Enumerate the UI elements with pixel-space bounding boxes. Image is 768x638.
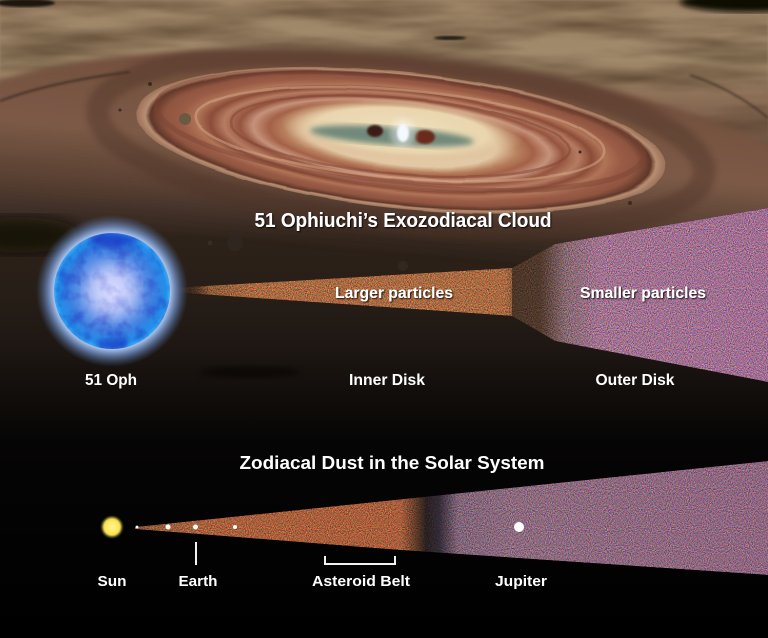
label: Jupiter: Jupiter xyxy=(495,573,547,590)
label: Asteroid Belt: Asteroid Belt xyxy=(312,573,410,590)
Asteroid Belt bracket xyxy=(325,556,395,564)
label: inner disk: Inner Disk xyxy=(349,372,425,389)
heading: zodiacal dust: Zodiacal Dust in the Solar System xyxy=(240,453,544,473)
planet markers xyxy=(136,522,524,532)
illustration: circumstellar disk xyxy=(89,29,713,255)
label: outer disk: Outer Disk xyxy=(596,372,675,389)
sun xyxy=(100,515,124,539)
rocks in the disk xyxy=(118,82,632,271)
label: smaller particles: Smaller particles xyxy=(580,285,706,302)
label: 51 Oph: 51 Oph xyxy=(85,372,137,389)
label: Sun: Sun xyxy=(98,573,126,590)
disk core: bright inner gap and star xyxy=(278,91,526,169)
heading: exozodiacal cloud: 51 Ophiuchi’s Exozodiacal Cloud xyxy=(254,210,552,232)
star: 51 Oph xyxy=(36,215,188,367)
label: larger particles: Larger particles xyxy=(335,285,453,302)
solar system dust wedge xyxy=(135,461,768,575)
outer disk wedge: smaller particles xyxy=(512,208,768,382)
label: Earth: Earth xyxy=(178,573,218,590)
inner disk wedge: larger particles xyxy=(170,268,512,316)
Earth pointer line xyxy=(195,542,197,565)
